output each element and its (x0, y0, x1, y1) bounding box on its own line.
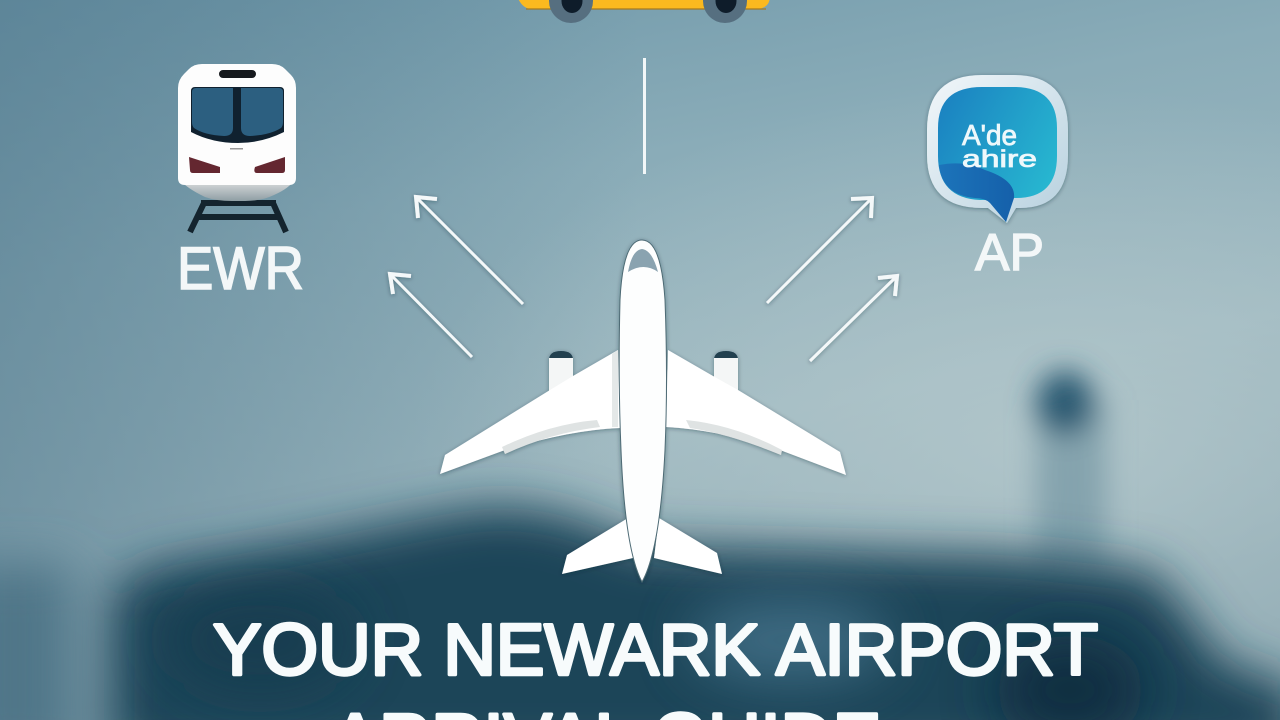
icon: train (178, 64, 296, 232)
train windshield (191, 87, 284, 143)
arrows (390, 197, 897, 361)
train body (178, 178, 296, 201)
fuselage (619, 240, 666, 582)
vertical route line (643, 58, 646, 174)
train tracks (190, 203, 286, 232)
lighter haze patch in building (690, 598, 890, 682)
app logo text: A'de (962, 120, 1017, 152)
icon: bus (cropped at top) (517, 0, 770, 23)
label: EWR: EWR (177, 235, 304, 302)
icon: airplane (440, 240, 846, 582)
engines (549, 351, 573, 392)
app logo text: ahire (962, 146, 1037, 173)
darker patch in building (995, 635, 1145, 720)
title: YOUR NEWARK AIRPORT (213, 610, 1098, 690)
wings (440, 350, 620, 474)
tailplane (562, 518, 633, 574)
label: AP: AP (975, 224, 1044, 282)
icon: app speech bubble (927, 75, 1068, 223)
app logo text (962, 120, 1037, 173)
